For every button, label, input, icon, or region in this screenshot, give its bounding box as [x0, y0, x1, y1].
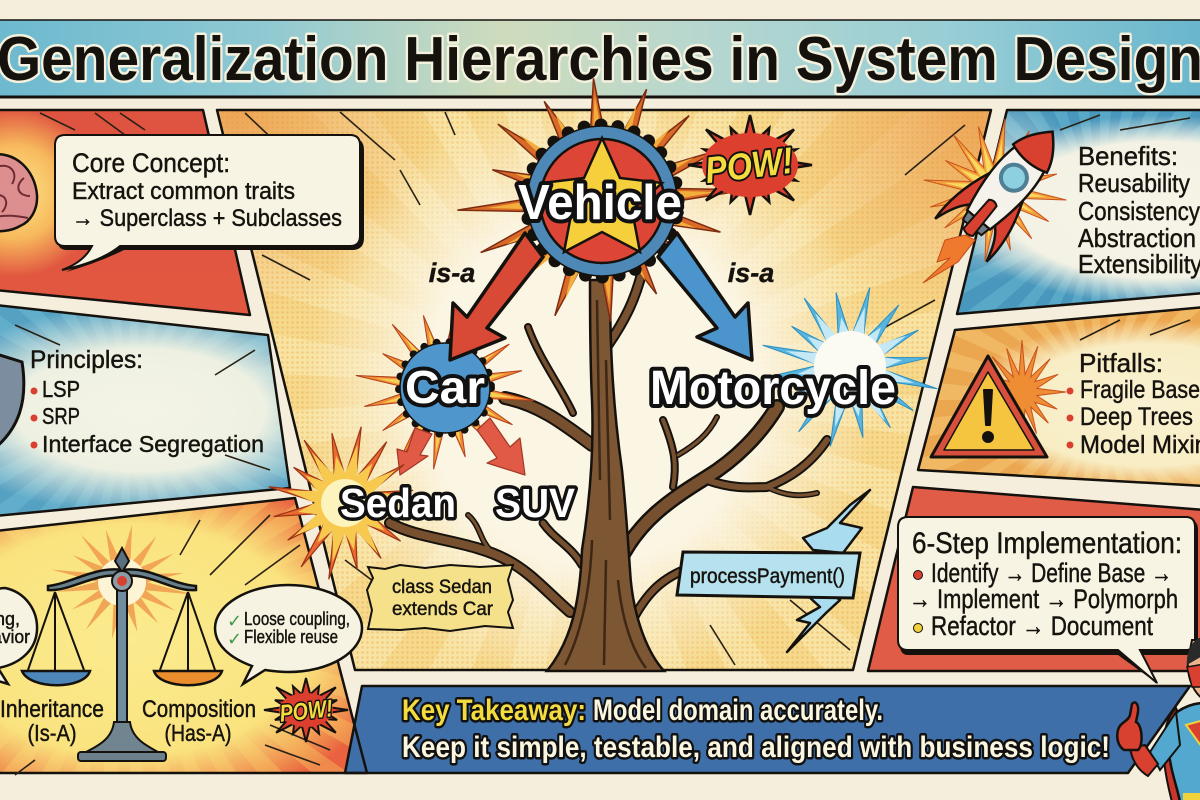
label: is-a left: is-a [429, 258, 475, 288]
text: pitfalls: Pitfalls: [1079, 348, 1163, 378]
node: sedan: Sedan [340, 480, 456, 526]
panel: pitfalls background [920, 308, 1200, 484]
callout: core concept: Core Concept: [72, 148, 230, 178]
panel: benefits background [958, 111, 1200, 313]
text: principles: LSP [42, 376, 80, 402]
text: benefits [1078, 141, 1200, 279]
tree [390, 272, 827, 671]
label: is-a right: is-a [728, 258, 774, 288]
label: has-a: (Has-A) [164, 720, 232, 746]
icon: balance scale [22, 512, 222, 761]
note: class sedan extends car: class Sedan [392, 577, 492, 598]
panel: six step background [870, 488, 1200, 670]
burst: pow [688, 115, 812, 215]
node: vehicle badge [518, 125, 682, 277]
speech bubble: composition: Flexible reuse [244, 627, 338, 647]
node: car badge: Car [405, 361, 485, 413]
burst: pow: POW! [703, 140, 795, 191]
callout: core concept [55, 135, 364, 272]
text: key takeaway: Keep it simple, testable, and aligned with business logic! [402, 731, 1110, 764]
burst: car [344, 294, 546, 482]
panel: principles background [0, 306, 289, 514]
icon: warning triangle [931, 340, 1066, 457]
burst: motorcycle [743, 266, 957, 468]
callout: core concept: Extract common traits [72, 178, 295, 205]
label: is-a: (Is-A) [28, 720, 76, 746]
node: motorcycle: Motorcycle [650, 362, 896, 415]
label: inheritance: Inheritance [0, 696, 104, 723]
arrow: vehicle to car [450, 233, 543, 360]
pow burst small [264, 678, 348, 742]
arrow: vehicle to motorcycle [658, 233, 752, 360]
pow burst small: POW! [278, 695, 334, 728]
text: key takeaway: Model domain accurately. [593, 694, 883, 727]
text: key takeaway [402, 694, 1110, 764]
label: composition: Composition [142, 696, 256, 723]
text: key takeaway: Key Takeaway: [402, 694, 586, 727]
panel: inheritance vs composition background [0, 499, 353, 772]
icon: superhero [1117, 637, 1200, 800]
icon: shield [0, 352, 24, 452]
node: vehicle badge: Vehicle [518, 176, 682, 230]
speech bubble: composition [215, 585, 362, 684]
speech bubble: composition: ✓ [227, 611, 242, 632]
arrow: car to suv [477, 418, 525, 475]
text: pitfalls [1066, 348, 1200, 459]
text: principles: SRP [42, 403, 80, 429]
arrow: car to sedan [397, 428, 432, 475]
callout: six step implementation [898, 517, 1198, 684]
note: class sedan extends car: extends Car [392, 599, 494, 620]
text: principles [30, 346, 264, 457]
callout: core concept: → Superclass + Subclasses [72, 205, 342, 232]
text: benefits: Benefits: [1078, 141, 1178, 171]
text: principles: Interface Segregation [42, 431, 264, 457]
speech bubble: composition: Loose coupling, [244, 609, 350, 629]
starburst: vehicle [449, 68, 755, 332]
icon: rocket [914, 109, 1078, 283]
panel: key takeaway background [346, 687, 1188, 772]
node: suv: SUV [495, 480, 576, 526]
speech bubble: inheritance [0, 588, 37, 684]
icon: brain [0, 154, 37, 231]
panel: title banner [0, 20, 1200, 96]
callout: processPayment lightning: processPayment() [690, 565, 845, 588]
callout: six step implementation: Refactor → Document [931, 611, 1153, 641]
text: principles: Principles: [30, 346, 143, 374]
speech bubble: composition: ✓ [227, 629, 242, 650]
burst: sedan [252, 410, 438, 596]
node: car badge [399, 342, 491, 434]
panel: core concept background [0, 111, 248, 314]
panel: central hierarchy background [218, 111, 990, 669]
note: class sedan extends car [367, 565, 513, 631]
callout: processPayment lightning [677, 490, 870, 652]
